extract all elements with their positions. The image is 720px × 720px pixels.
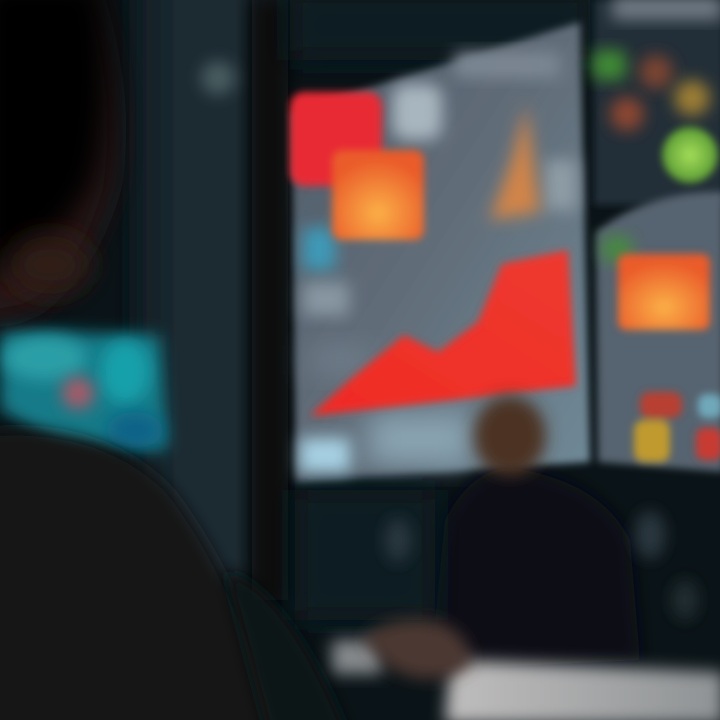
foreground head silhouette <box>0 0 117 322</box>
light tile <box>392 84 442 140</box>
icon: multicolor pie <box>634 392 720 462</box>
panel: right lower dashboard <box>596 192 720 472</box>
chart: red area chart <box>310 250 576 416</box>
icon: orange tile <box>618 254 710 330</box>
icon: orange triangle chart <box>490 105 540 220</box>
desk surface <box>332 640 720 720</box>
lower wall details <box>295 490 698 620</box>
hand <box>362 619 470 679</box>
left cyan tablet <box>0 330 168 450</box>
icon: orange square <box>332 150 424 240</box>
icon: red square <box>290 92 382 186</box>
icon: green circle <box>662 127 718 183</box>
panel: main dashboard screen <box>290 22 590 482</box>
panel: right upper dashboard <box>592 0 720 205</box>
person at screen <box>430 396 640 670</box>
foreground shoulder silhouette <box>0 430 350 720</box>
